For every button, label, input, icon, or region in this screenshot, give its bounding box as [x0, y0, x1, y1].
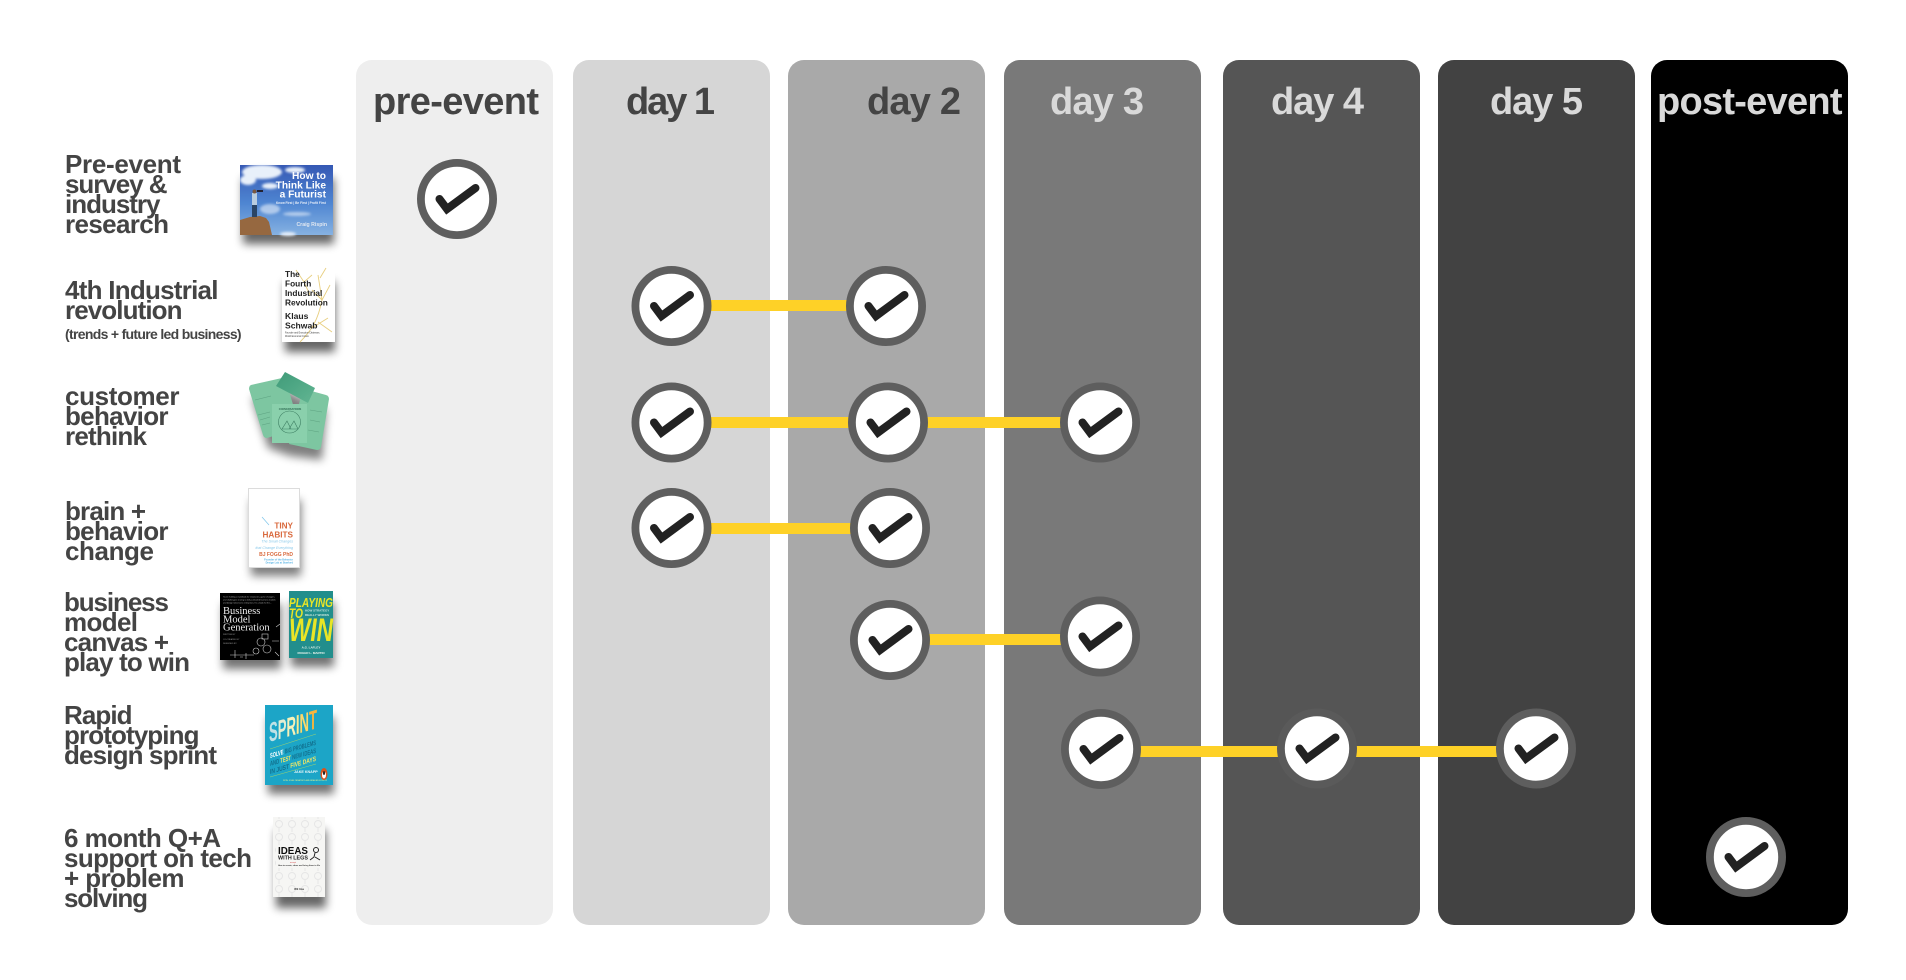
- book: Playing to Win: WIN: [289, 612, 334, 648]
- book: The Fourth Industrial Revolution: Revolution: [285, 298, 328, 308]
- book: The Fourth Industrial Revolution: Founder and Executive Chairman,: [285, 332, 320, 334]
- label: rapid prototyping: prototyping: [64, 720, 200, 750]
- connector: row 4: [700, 523, 865, 534]
- label: 6 month Q+A: support on tech: [64, 843, 252, 873]
- connector: row 6: [1120, 746, 1520, 757]
- connector: row 5: [915, 634, 1080, 645]
- book: Tiny Habits: Founder of the Behavior: [264, 558, 293, 562]
- label: pre-event survey: research: [65, 209, 169, 239]
- book: The Fourth Industrial Revolution: Fourth: [285, 278, 311, 288]
- label: customer behavior rethink: rethink: [65, 421, 148, 451]
- label: business model canvas: model: [64, 607, 138, 637]
- panel: pre-event: [356, 60, 553, 925]
- label: customer behavior rethink: behavior: [65, 401, 168, 431]
- label: brain + behavior change: behavior: [65, 516, 168, 546]
- check: rapid prototyping, day 3: [1065, 713, 1137, 785]
- book: Business Model Generation: and design tomorrow's enterprises. It's a book for the...: [223, 602, 272, 604]
- book: Tiny Habits: BJ FOGG PhD: [259, 552, 293, 558]
- check: customer behavior, day 2: [852, 386, 924, 459]
- panel: day 4: [1223, 60, 1420, 925]
- label: 6 month Q+A: solving: [64, 883, 148, 913]
- label: 6 month Q+A: + problem: [64, 863, 184, 893]
- book: Business Model Generation: WRITTEN BY: [223, 634, 236, 636]
- book: The Fourth Industrial Revolution: World Economic Forum: [285, 335, 309, 338]
- book: Business Model Generation: Generation: [223, 622, 270, 634]
- label: customer behavior rethink: [65, 381, 180, 451]
- book: How to Think Like a Futurist: How to: [292, 171, 326, 182]
- label: pre-event survey: survey &: [65, 169, 168, 199]
- panel: post-event: [1651, 60, 1848, 925]
- label: brain + behavior change: [65, 496, 168, 566]
- label: business model canvas: canvas +: [64, 627, 169, 657]
- label: customer behavior rethink: customer: [65, 381, 180, 411]
- label: pre-event survey: industry: [65, 189, 161, 219]
- check: brain, day 1: [635, 492, 708, 564]
- connector: row 3: [700, 417, 1080, 428]
- heading: day 2: day 2: [867, 81, 961, 123]
- check: 4th industrial, day 2: [850, 270, 922, 342]
- book: The Fourth Industrial Revolution: The: [285, 269, 300, 279]
- book: The Fourth Industrial Revolution: Schwab: [285, 320, 317, 330]
- book: How to Think Like a Futurist: Craig Rispin: [296, 222, 327, 228]
- book: The Fourth Industrial Revolution: [282, 264, 335, 352]
- check: business model, day 2: [854, 604, 926, 676]
- book: How to Think Like a Futurist: Know First | Be First | Profit First: [276, 201, 327, 205]
- book: Sprint: IN JUST FIVE DAYS: [270, 756, 316, 776]
- book: How to Think Like a Futurist: [240, 165, 334, 244]
- label: business model canvas: play to win: [64, 647, 190, 677]
- book: Business Model Generation: DESIGNED BY: [223, 643, 237, 645]
- book: Sprint: SPRINT: [269, 704, 317, 748]
- book: The Fourth Industrial Revolution: Industrial: [285, 288, 322, 298]
- book: Playing to Win: REALLY WORKS: [305, 613, 329, 617]
- book: Sprint: AND TEST NEW IDEAS: [270, 748, 316, 768]
- label: rapid prototyping: Rapid: [64, 700, 132, 730]
- book: Ideas With Legs: Wil Ima: [294, 887, 304, 891]
- book: Business Model Generation: You're holding a handbook for visionaries, game changers,: [223, 596, 275, 598]
- book: Tiny Habits: The Small Changes: [261, 540, 293, 544]
- cards: green customer behavior deck: [249, 372, 329, 460]
- label: 6 month Q+A: 6 month Q+A: [64, 823, 221, 853]
- panel: day 1: [573, 60, 770, 925]
- check: brain, day 2: [854, 492, 926, 564]
- check: survey, pre-event: [421, 163, 493, 235]
- label: 4th industrial revolution: revolution: [65, 295, 182, 325]
- label: brain + behavior change: change: [65, 536, 154, 566]
- label: 4th industrial revolution: [65, 275, 242, 342]
- label: business model canvas: business: [64, 587, 169, 617]
- connector: row 2: [700, 300, 860, 311]
- book: Ideas With Legs: How to create, share and bring them to life: [278, 864, 321, 867]
- panel: day 3: [1004, 60, 1201, 925]
- book: Playing to Win: PLAYING: [289, 595, 333, 610]
- book: Business Model Generation: Model: [223, 614, 250, 626]
- check: customer behavior, day 1: [635, 386, 708, 459]
- book: Ideas With Legs: IDEAS: [278, 846, 308, 857]
- heading: day 4: day 4: [1271, 81, 1364, 123]
- check: 4th industrial, day 1: [635, 270, 708, 342]
- book: Business Model Generation: CO-CREATED BY: [223, 638, 240, 641]
- book: Playing to Win: HOW STRATEGY: [305, 608, 329, 612]
- label: 4th industrial revolution: 4th Industrial: [65, 275, 218, 305]
- book: Playing to Win: [289, 591, 334, 667]
- book: Tiny Habits: Design Lab at Stanford: [266, 562, 293, 564]
- book: Sprint: JAKE KNAPP: [294, 770, 318, 774]
- book: Tiny Habits: HABITS: [263, 530, 294, 540]
- book: How to Think Like a Futurist: a Futurist: [280, 190, 327, 200]
- heading: day 3: day 3: [1050, 81, 1144, 123]
- check: rapid prototyping, day 5: [1500, 712, 1572, 785]
- book: How to Think Like a Futurist: Think Like: [276, 180, 326, 192]
- panel: day 2: [788, 60, 985, 925]
- label: pre-event survey: Pre-event: [65, 149, 181, 179]
- book: Tiny Habits: TINY: [274, 522, 294, 530]
- book: Playing to Win: ROGER L. MARTIN: [298, 651, 324, 655]
- label: 6 month Q+A: [64, 823, 252, 913]
- book: Ideas With Legs: [273, 817, 326, 908]
- label: pre-event survey: [65, 149, 181, 239]
- heading: pre-event: pre-event: [373, 81, 539, 123]
- book: Playing to Win: TO: [289, 605, 303, 621]
- sublabel: trends: (trends + future led business): [65, 326, 242, 342]
- label: rapid prototyping: [64, 700, 217, 770]
- book: The Fourth Industrial Revolution: Klaus: [285, 311, 309, 321]
- check: Q+A support, post-event: [1710, 821, 1782, 893]
- check: customer behavior, day 3: [1064, 386, 1136, 459]
- heading: day 5: day 5: [1490, 81, 1583, 123]
- heading: day 1: day 1: [626, 81, 715, 123]
- book: Sprint: [265, 704, 334, 794]
- book: Business Model Generation: Business: [223, 606, 260, 617]
- label: business model canvas: [64, 587, 190, 677]
- book: Business Model Generation: [220, 593, 281, 669]
- label: brain + behavior change: brain +: [65, 496, 146, 526]
- heading: post-event: post-event: [1657, 81, 1843, 123]
- check: rapid prototyping, day 4: [1281, 712, 1353, 785]
- cards: green customer behavior deck: CONVERSATIONS: [279, 407, 301, 411]
- label: rapid prototyping: design sprint: [64, 740, 217, 770]
- panel: day 5: [1438, 60, 1635, 925]
- book: Ideas With Legs: accept: [290, 861, 296, 864]
- book: Business Model Generation: and challengers striving to defy outmoded business models: [223, 598, 275, 602]
- book: Tiny Habits: [248, 488, 301, 576]
- book: Sprint: WITH JOHN ZERATSKY AND BRADEN KOWITZ: [283, 779, 328, 782]
- book: Playing to Win: A.G. LAFLEY: [302, 646, 320, 650]
- book: Tiny Habits: that Change Everything: [255, 546, 293, 550]
- check: business model, day 3: [1064, 600, 1136, 673]
- book: Ideas With Legs: WITH LEGS: [278, 856, 308, 862]
- book: Sprint: SOLVE BIG PROBLEMS: [270, 740, 316, 760]
